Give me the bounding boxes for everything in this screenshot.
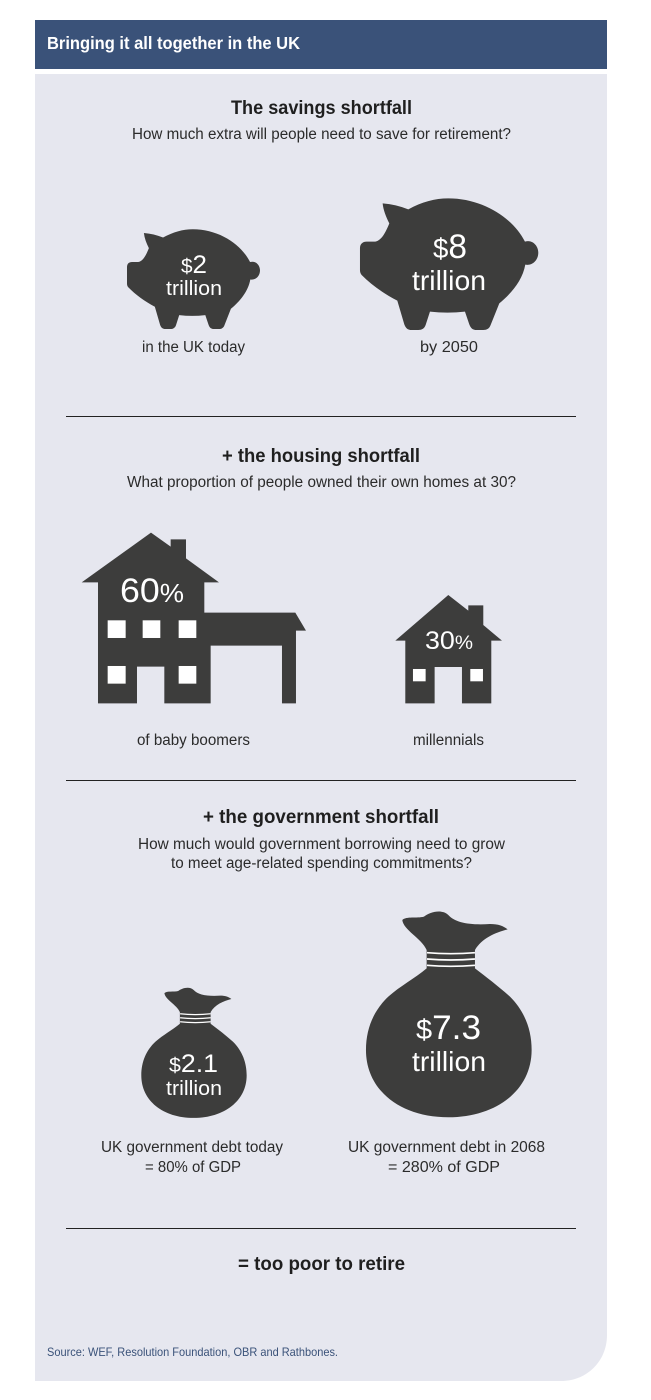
icon: small money bag $2.1 trillion: trillion	[166, 1078, 222, 1100]
icon: small money bag $2.1 trillion	[141, 988, 247, 1118]
icon: large money bag $7.3 trillion: trillion	[412, 1046, 486, 1077]
source note: Source: WEF, Resolution Foundation, OBR and Rathbones.	[47, 1345, 338, 1359]
icon: large piggy bank $8 trillion: $8	[433, 228, 467, 266]
icon: small piggy bank $2 trillion: $2	[181, 251, 207, 279]
header bar	[35, 20, 607, 69]
question: government	[138, 836, 506, 872]
icon: large house 60%	[82, 533, 306, 703]
label: in the UK today: in the UK today	[142, 339, 245, 356]
value: 60%: 60%	[120, 572, 184, 610]
heading: housing shortfall: + the housing shortfall	[222, 445, 420, 467]
icon: large piggy bank $8 trillion	[360, 198, 538, 330]
section: savings shortfall	[127, 97, 538, 356]
icon: small money bag $2.1 trillion: $2.1	[169, 1050, 218, 1078]
conclusion: too poor to retire: = too poor to retire	[238, 1253, 405, 1275]
question: government: How much would government borrowing need to grow	[138, 836, 506, 853]
header title: Bringing it all together in the UK	[47, 33, 300, 53]
label: UK government debt today	[101, 1139, 283, 1176]
label: UK government debt in 2068: = 280% of GDP	[388, 1159, 500, 1176]
question: government: to meet age-related spending commitments?	[171, 855, 472, 872]
label: UK government debt today: UK government debt today	[101, 1139, 283, 1156]
value: 30%: 30%	[425, 627, 473, 655]
heading: government shortfall: + the government shortfall	[203, 806, 439, 828]
section: housing shortfall	[82, 445, 516, 749]
icon: large piggy bank $8 trillion: trillion	[412, 265, 486, 296]
label: UK government debt in 2068	[348, 1139, 545, 1176]
section: government shortfall	[101, 806, 545, 1176]
label: UK government debt in 2068: UK government debt in 2068	[348, 1139, 545, 1156]
icon: large money bag $7.3 trillion: $7.3	[416, 1009, 481, 1047]
label: of baby boomers: of baby boomers	[137, 732, 250, 749]
icon: small house 30%	[395, 595, 502, 703]
icon: small piggy bank $2 trillion	[127, 229, 260, 329]
icon: small piggy bank $2 trillion: trillion	[166, 278, 222, 300]
label: by 2050: by 2050	[420, 339, 478, 356]
label: UK government debt today: = 80% of GDP	[145, 1159, 241, 1176]
heading: savings shortfall: The savings shortfall	[231, 97, 412, 119]
icon: large money bag $7.3 trillion	[366, 912, 532, 1117]
question: savings: How much extra will people need to save for retirement?	[132, 126, 511, 143]
question: housing: What proportion of people owned their own homes at 30?	[127, 474, 516, 491]
label: millennials: millennials	[413, 732, 484, 749]
